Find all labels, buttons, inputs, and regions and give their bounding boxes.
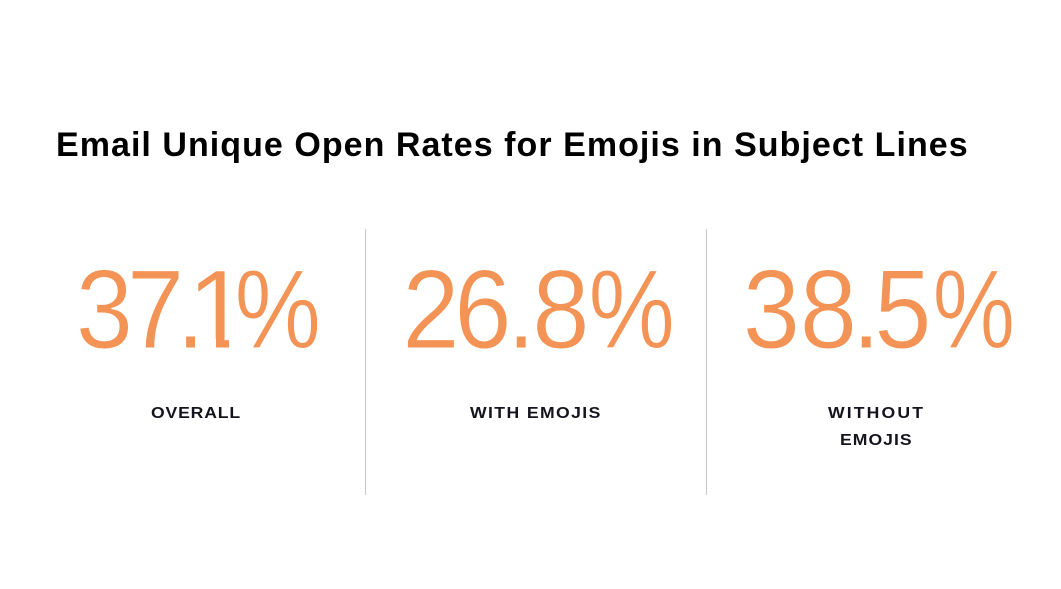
stat: overall value: 1 (187, 247, 249, 372)
stat: overall value: % (234, 248, 321, 373)
stat: without emojis value: 38.5 (743, 247, 932, 372)
stat: with emojis value: % (588, 248, 675, 373)
stat: without emojis value: % (932, 247, 1015, 372)
stat: with emojis value (402, 247, 675, 373)
stat: without emojis label: WITHOUT (828, 405, 925, 422)
stat: with emojis value: 26.8 (402, 247, 590, 372)
stat: without emojis label (828, 405, 925, 449)
stat: without emojis label: EMOJIS (840, 432, 913, 449)
stat: overall value: 37. (76, 247, 205, 372)
stat: without emojis value (743, 247, 1015, 372)
stat: with emojis label: WITH EMOJIS (470, 405, 602, 422)
title: Email Unique Open Rates for Emojis in Subject Lines (56, 126, 969, 164)
stat: overall value (80, 270, 318, 348)
stat: overall label: OVERALL (151, 405, 241, 422)
